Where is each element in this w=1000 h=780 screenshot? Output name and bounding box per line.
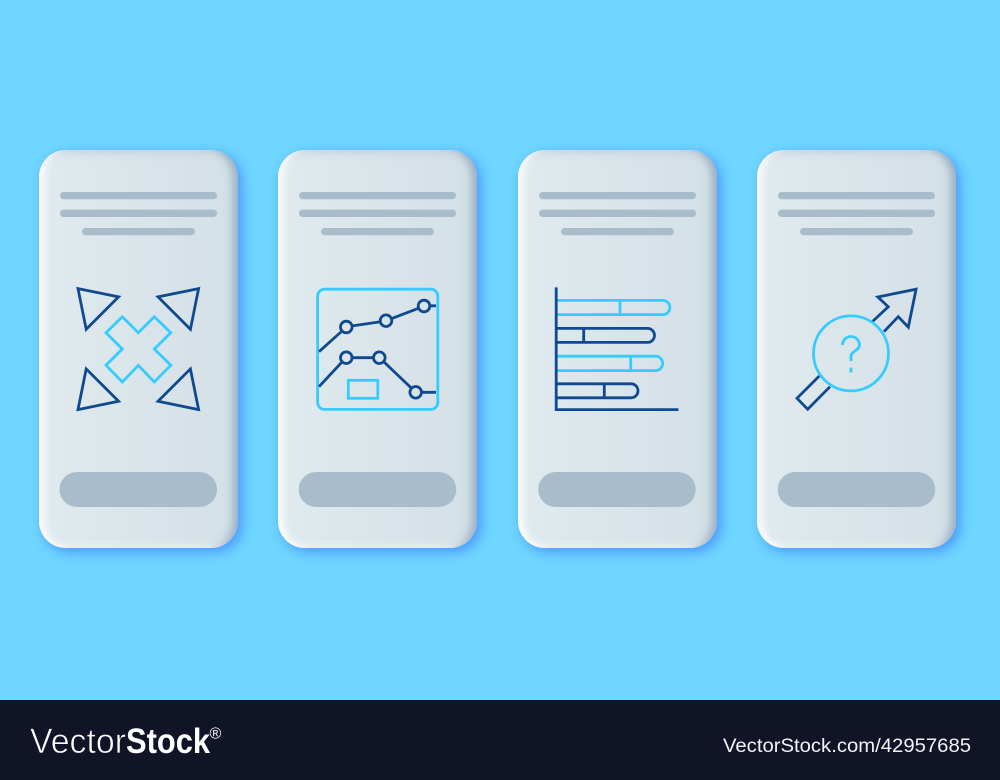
panel: card 2, line chart [278,150,477,548]
icon: horizontal bar chart [556,287,678,410]
button placeholder [538,472,696,507]
image id url: VectorStock.com/42957685 [723,736,971,757]
button placeholder [778,472,935,507]
panel: card 4, arrow with question mark [757,150,956,548]
button placeholder [299,472,456,507]
text placeholder lines [299,192,456,235]
text placeholder lines [778,192,935,235]
logo wordmark: ® [210,726,222,742]
button placeholder [60,472,217,507]
logo wordmark [30,722,222,761]
text placeholder lines [539,192,696,235]
footer bar [0,700,1000,780]
icon: line chart in a rounded frame [318,289,438,409]
icon: diagonal arrow behind question circle [797,289,916,409]
panel: card 3, horizontal bar chart [518,150,717,548]
text placeholder lines [60,192,217,235]
logo wordmark: Vector [30,722,126,761]
logo wordmark: Stock [126,722,210,761]
icon: four triangles around a cross [78,289,199,410]
panel: card 1, expand arrows [39,150,238,548]
